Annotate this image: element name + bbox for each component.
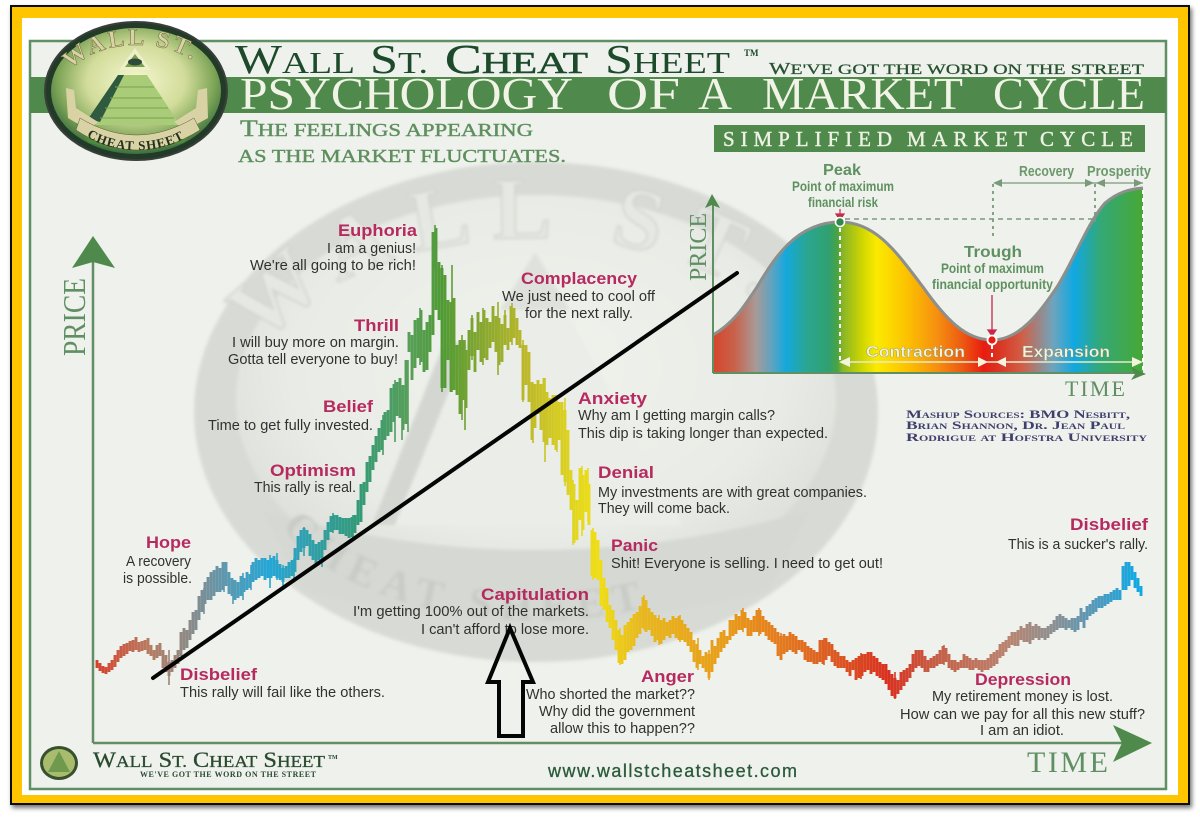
website url: www.wallstcheatsheet.com — [547, 761, 797, 781]
label: hope: is possible. — [123, 571, 192, 587]
mashup sources — [906, 407, 1147, 444]
title: psychology of a market cycle: CYCLE — [993, 68, 1145, 119]
axis: price: PRICE — [56, 278, 92, 356]
title: psychology of a market cycle — [240, 68, 1145, 119]
title band — [30, 77, 1166, 113]
label: hope: Hope — [146, 533, 191, 552]
label: anger: Why did the government — [539, 704, 695, 720]
inset axes: PRICE — [686, 213, 712, 281]
watermark seal — [194, 162, 878, 662]
label: disbelief: This rally will fail like the others. — [180, 685, 385, 701]
label: belief — [208, 397, 373, 434]
watermark seal: WALL ST. — [223, 182, 758, 330]
trough label: Point of maximum — [941, 260, 1044, 276]
recovery prosperity arrows: Prosperity — [1087, 163, 1152, 180]
label: disbelief rally — [1008, 515, 1148, 553]
label: denial: They will come back. — [598, 501, 730, 517]
logo: wall st. cheat sheet seal — [44, 21, 228, 161]
mashup sources: Rodrigue at Hofstra University — [906, 430, 1147, 444]
label: depression — [900, 670, 1145, 739]
watermark seal: CHEAT SHEET — [288, 514, 632, 620]
label: panic — [611, 536, 883, 572]
recovery prosperity arrows — [993, 163, 1152, 187]
label: anxiety: Anxiety — [578, 389, 648, 408]
label: euphoria: We're all going to be rich! — [250, 258, 416, 274]
label: anxiety: This dip is taking longer than expected. — [578, 426, 828, 442]
label: capitulation: Capitulation — [481, 585, 589, 604]
label: complacency — [502, 269, 656, 322]
label: depression: How can we pay for all this new stuff? — [900, 707, 1145, 723]
peak label: Peak — [823, 162, 861, 179]
annotation: black up arrow — [488, 628, 533, 736]
label: panic: Shit! Everyone is selling. I need to get out! — [611, 556, 883, 572]
label: complacency: We just need to cool off — [502, 289, 656, 305]
label: optimism: This rally is real. — [254, 480, 356, 496]
logo: wall st. cheat sheet seal: CHEAT SHEET — [88, 130, 182, 150]
trough label: financial opportunity — [932, 276, 1053, 292]
label: denial: Denial — [598, 463, 654, 482]
label: depression: My retirement money is lost. — [932, 689, 1113, 705]
contraction expansion — [839, 344, 1143, 367]
label: depression: Depression — [975, 670, 1071, 689]
label: anger — [526, 667, 695, 737]
trough label — [932, 244, 1053, 344]
label: complacency: for the next rally. — [525, 306, 633, 322]
label: thrill: I will buy more on margin. — [232, 335, 399, 351]
contraction expansion: Contraction — [866, 344, 965, 361]
panel: simplified market cycle — [686, 125, 1152, 401]
label: hope: A recovery — [126, 554, 192, 570]
label: optimism: Optimism — [270, 461, 356, 480]
label: disbelief: Disbelief — [180, 665, 257, 684]
axis: time: TIME — [1027, 746, 1108, 779]
label: thrill: Thrill — [354, 316, 399, 335]
label: euphoria — [250, 221, 418, 274]
label: anxiety — [578, 389, 828, 442]
peak label: Point of maximum — [792, 178, 894, 194]
inset axes — [686, 194, 1146, 401]
label: depression: I am an idiot. — [980, 723, 1064, 739]
inset chart: wave — [713, 188, 1143, 373]
label: anger: Anger — [641, 667, 694, 686]
trough label: Trough — [964, 244, 1022, 261]
label: euphoria: Euphoria — [338, 221, 418, 240]
mashup sources: Brian Shannon, Dr. Jean Paul — [906, 418, 1125, 432]
label: disbelief — [180, 665, 385, 701]
title: Wall St. Cheat Sheet: TM — [744, 48, 759, 58]
label: disbelief rally: This is a sucker's rally. — [1008, 537, 1148, 553]
axis: price — [56, 236, 115, 743]
footer brand: WALL ST. CHEAT SHEET — [93, 747, 326, 772]
title: Wall St. Cheat Sheet: ST. — [370, 36, 428, 82]
label: thrill — [228, 316, 399, 368]
banner: simplified market cycle: CYCLE — [1040, 127, 1133, 151]
label: denial — [598, 463, 867, 517]
label: belief: Time to get fully invested. — [208, 418, 373, 434]
subtitle: THE FEELINGS APPEARING — [240, 116, 533, 141]
footer logo — [40, 746, 78, 780]
label: thrill: Gotta tell everyone to buy! — [228, 352, 398, 368]
banner: simplified market cycle — [714, 125, 1145, 152]
logo: wall st. cheat sheet seal: WALL ST. — [60, 29, 192, 66]
inset axes: TIME — [1065, 376, 1125, 401]
peak label — [792, 162, 894, 226]
title: Wall St. Cheat Sheet: SHEET — [605, 36, 730, 82]
title: Wall St. Cheat Sheet — [235, 36, 759, 82]
banner: simplified market cycle: SIMPLIFIED — [723, 127, 892, 151]
label: anxiety: Why am I getting margin calls? — [578, 408, 775, 424]
contraction expansion: Expansion — [1022, 344, 1110, 361]
footer brand: TM — [328, 755, 338, 761]
label: denial: My investments are with great companies. — [598, 485, 867, 501]
title: psychology of a market cycle: A — [698, 68, 732, 119]
annotation: black trend line — [153, 273, 737, 678]
mashup sources: Mashup Sources: BMO Nesbitt, — [906, 407, 1130, 421]
label: capitulation — [353, 585, 589, 638]
subtitle: AS THE MARKET FLUCTUATES. — [238, 146, 566, 166]
title: psychology of a market cycle: MARKET — [762, 68, 963, 119]
label: capitulation: I can't afford to lose more. — [421, 622, 589, 638]
label: belief: Belief — [323, 397, 373, 416]
peak label: financial risk — [808, 194, 878, 210]
label: capitulation: I'm getting 100% out of the markets. — [353, 604, 589, 620]
label: anger: allow this to happen?? — [550, 721, 695, 737]
label: panic: Panic — [611, 536, 658, 555]
label: complacency: Complacency — [521, 269, 638, 288]
tagline: W E'VE GOT THE WORD ON THE STREET — [769, 59, 1144, 78]
subtitle — [238, 116, 566, 166]
title: Wall St. Cheat Sheet: C HEAT — [445, 36, 588, 82]
label: anger: Who shorted the market?? — [526, 687, 695, 703]
banner: simplified market cycle: MARKET — [907, 127, 1027, 151]
label: euphoria: I am a genius! — [327, 241, 416, 257]
label: optimism — [254, 461, 356, 496]
title: psychology of a market cycle: PSYCHOLOGY — [240, 68, 573, 119]
label: disbelief rally: Disbelief — [1070, 515, 1148, 534]
dashed guides — [840, 184, 1143, 372]
recovery prosperity arrows: Recovery — [1019, 163, 1075, 180]
axis: time — [93, 725, 1152, 779]
price chart: market cycle candlesticks — [97, 225, 1141, 699]
title: psychology of a market cycle: OF — [607, 68, 680, 119]
title: Wall St. Cheat Sheet: W ALL — [235, 36, 355, 82]
footer brand: WE'VE GOT THE WORD ON THE STREET — [140, 770, 317, 779]
label: hope — [123, 533, 192, 587]
